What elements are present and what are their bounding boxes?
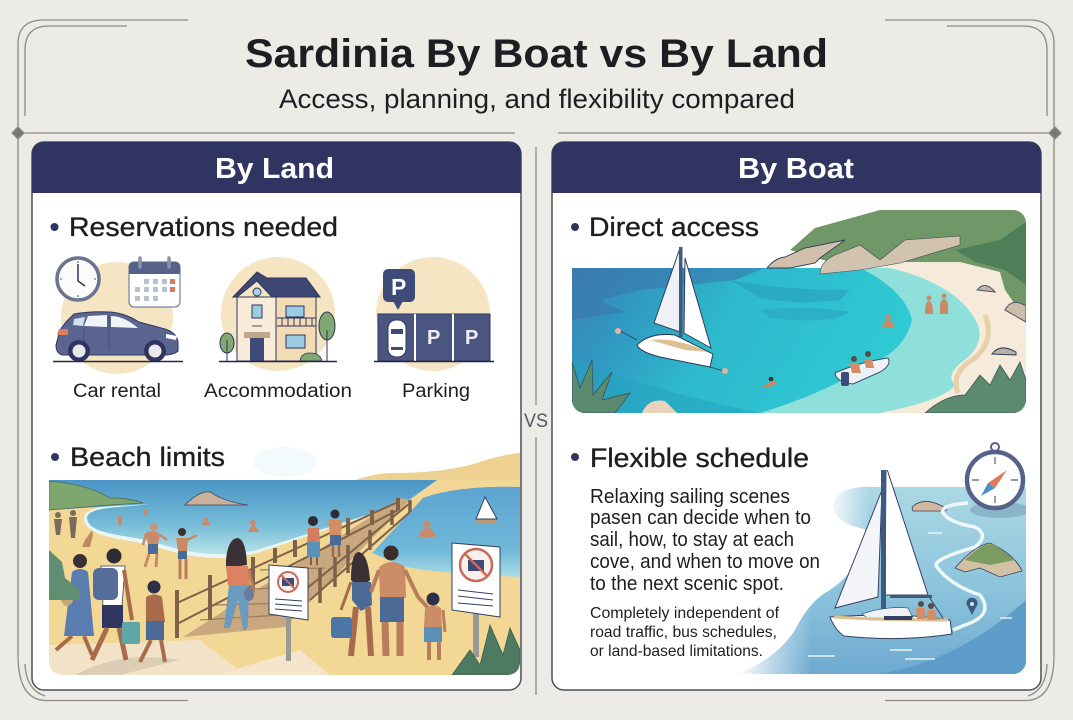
map pin	[966, 598, 977, 615]
distant people	[54, 510, 93, 547]
text block: independent	[590, 605, 780, 660]
icon: parking: P	[391, 274, 406, 300]
swimmers	[762, 294, 948, 388]
title: Sardinia By Boat vs By Land	[245, 32, 828, 76]
text block: relaxing sailing: cove, and when to move on	[590, 551, 820, 573]
plants	[572, 360, 630, 413]
heading: flexible schedule: Flexible schedule	[590, 443, 809, 473]
people: family left	[56, 548, 165, 662]
text block: relaxing sailing: pasen can decide when to	[590, 507, 811, 529]
heading: beach limits: Beach limits	[70, 442, 225, 472]
icon: accommodation	[219, 257, 337, 371]
heading: by land: By Land	[215, 153, 334, 185]
illustration: crowded beach	[49, 447, 520, 675]
subtitle: Access, planning, and flexibility compared	[279, 84, 795, 114]
label: accommodation: Accommodation	[204, 381, 352, 402]
fences	[177, 498, 410, 638]
people: on boardwalk	[307, 510, 342, 565]
bullet: reservations	[50, 223, 58, 231]
swimmers	[118, 509, 436, 537]
icon: parking: P	[465, 327, 478, 349]
bullet: flexible schedule	[571, 453, 579, 461]
text block: independent: road traffic, bus schedules,	[590, 624, 777, 641]
sailboat: main	[830, 465, 952, 639]
panel: by land	[32, 142, 521, 690]
text block: relaxing sailing	[590, 486, 820, 595]
heading: direct access: Direct access	[589, 212, 759, 242]
plants	[49, 550, 80, 600]
icon: parking	[374, 257, 494, 371]
vs label: VS	[524, 411, 548, 432]
icon: compass	[967, 443, 1023, 508]
panel: by boat	[552, 142, 1041, 690]
bullet: direct access	[571, 223, 579, 231]
sailboat: distant	[476, 497, 497, 519]
label: car rental: Car rental	[73, 381, 161, 402]
text block: independent: Completely independent of	[590, 605, 780, 622]
boardwalk	[183, 498, 410, 637]
text block: independent: or land-based limitations.	[590, 643, 763, 660]
text block: relaxing sailing: sail, how, to stay at each	[590, 529, 794, 551]
illustration: sailing route	[737, 465, 1030, 674]
bullet: beach limits	[51, 453, 59, 461]
panel header: by boat	[552, 142, 1041, 193]
people: family right	[331, 546, 445, 660]
illustration: cove	[572, 210, 1026, 413]
people: strolling pair centre	[143, 523, 197, 579]
icon: parking: P	[427, 327, 440, 349]
hills and rocks	[790, 210, 1026, 306]
text block: relaxing sailing: Relaxing sailing scenes	[590, 486, 790, 508]
sailboat: anchored	[615, 247, 728, 374]
heading: reservations needed: Reservations needed	[69, 212, 338, 242]
dinghy	[835, 351, 889, 386]
sign: no crowd right	[452, 543, 500, 657]
text block: relaxing sailing: to the next scenic spot.	[590, 573, 784, 595]
heading: by boat: By Boat	[738, 153, 854, 185]
person: woman centre	[224, 538, 254, 630]
icon: car rental	[53, 258, 183, 374]
panel header: by land	[32, 142, 521, 193]
sign: no crowd left	[269, 565, 308, 661]
label: parking: Parking	[402, 381, 470, 402]
